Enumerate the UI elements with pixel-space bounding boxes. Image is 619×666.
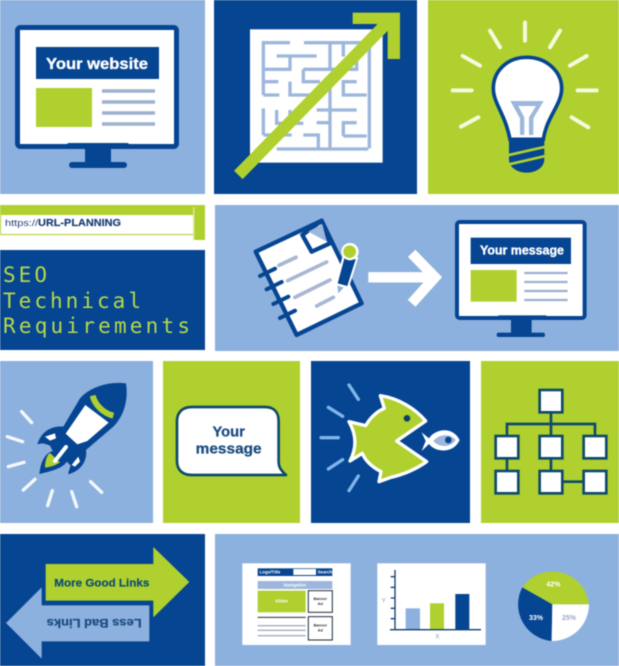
- title: Requirements: [3, 314, 190, 338]
- text: URL: https://: [5, 218, 38, 229]
- panel: URL planning bar: [0, 205, 205, 240]
- arrows: good and bad links: [6, 547, 189, 659]
- icon: monitor with website: [18, 28, 176, 168]
- wireframe page: Search: [318, 570, 332, 575]
- text: URL: URL-PLANNING: [38, 218, 121, 229]
- wireframe page: Banner: [313, 622, 328, 627]
- wireframe page: Navigation: [284, 583, 306, 588]
- icon: maze with arrow: [238, 13, 400, 175]
- text: more good links: More Good Links: [54, 577, 149, 589]
- wireframe page: Ad: [318, 601, 324, 606]
- panel: rocket: [0, 361, 153, 523]
- text: your message: message: [196, 442, 262, 458]
- bar chart: [377, 563, 486, 645]
- panel: speech bubble: [163, 361, 300, 523]
- title: Technical: [3, 289, 141, 313]
- title: SEO: [3, 263, 47, 287]
- icon: notebook and pencil: [256, 221, 362, 335]
- panel: wireframe, bar chart and pie: [215, 534, 619, 666]
- text: URL: [5, 218, 121, 229]
- wireframe page: [242, 563, 351, 645]
- text: less bad links: Less Bad Links: [47, 616, 142, 629]
- pie chart: 42%: [546, 582, 561, 589]
- bar chart: Y: [381, 597, 386, 604]
- bar chart: X: [435, 633, 440, 640]
- pie chart: [518, 571, 589, 641]
- panel: title: [0, 250, 205, 350]
- heading: your website: Your website: [46, 56, 148, 73]
- icon: monitor with message: [457, 222, 585, 337]
- heading: your message: Your message: [480, 243, 564, 257]
- panel: maze: [214, 0, 417, 194]
- panel: your website: [0, 0, 205, 194]
- wireframe page: Slider: [275, 598, 288, 603]
- panel: big fish: [311, 361, 470, 523]
- icon: fish eating small fish: [321, 385, 460, 491]
- wireframe page: Logo/Title: [260, 570, 281, 575]
- icon: speech bubble: [177, 407, 286, 475]
- wireframe page: Ad: [318, 627, 324, 632]
- text: your message: Your: [212, 425, 245, 441]
- pie chart: 33%: [529, 615, 544, 622]
- wireframe page: Banner: [313, 596, 328, 601]
- icon: organisation chart: [496, 390, 606, 493]
- title: [3, 263, 190, 338]
- panel: site structure: [481, 361, 619, 523]
- panel: links: [0, 534, 205, 666]
- panel: light bulb: [428, 0, 619, 194]
- panel: notes to message: [215, 205, 619, 351]
- icon: rocket: [7, 383, 127, 507]
- icon: light bulb: [453, 23, 597, 173]
- arrow: notes to message: [368, 253, 435, 303]
- pie chart: 25%: [562, 615, 577, 622]
- text: your message: [196, 425, 262, 458]
